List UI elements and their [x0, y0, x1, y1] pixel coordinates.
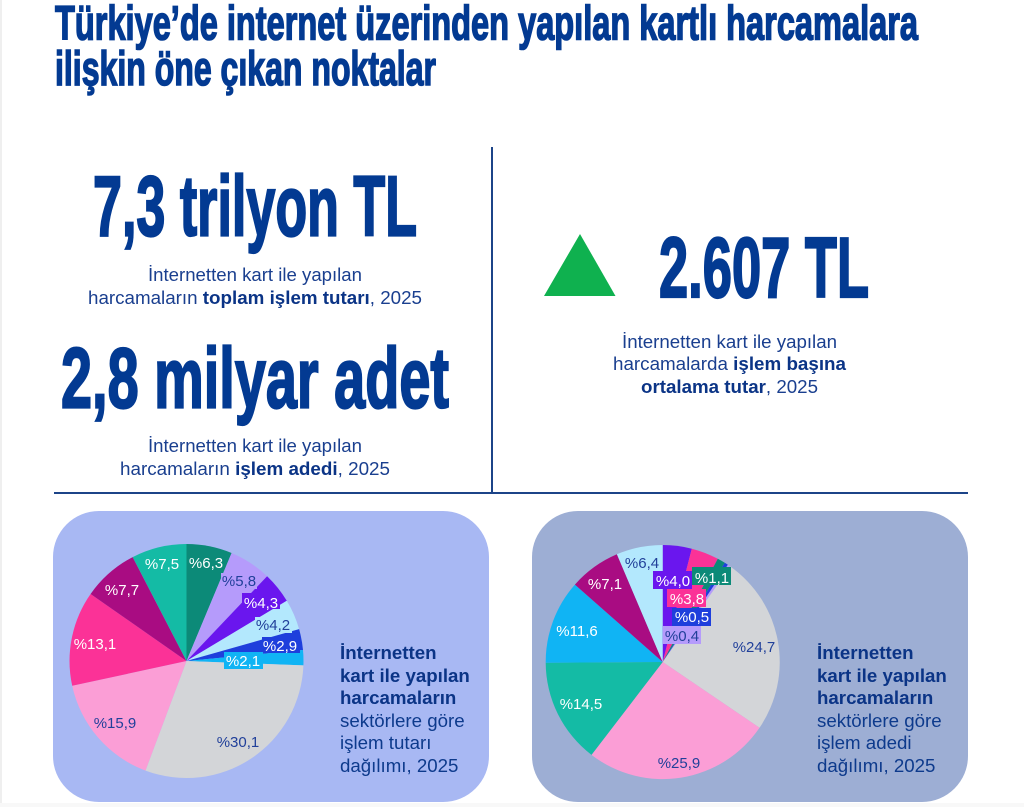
pie chart: amount shares: %4,3 [244, 595, 278, 612]
stat: average per transaction: ortalama tutar, 2025 [641, 376, 818, 397]
pie caption: amount: dağılımı, 2025 [340, 755, 458, 776]
stat: transaction count: İnternetten kart ile yapılan [148, 435, 362, 456]
stat: average per transaction: İnternetten kart ile yapılan [622, 331, 837, 352]
pie chart: count shares: %25,9 [658, 755, 700, 772]
title [55, 0, 918, 96]
pie chart: count shares: %7,1 [588, 576, 622, 593]
pie chart: count shares: %0,4 [665, 628, 699, 645]
pie caption: amount: harcamaların [340, 687, 456, 708]
pie chart: amount shares: %15,9 [94, 715, 136, 732]
icon: green up triangle [544, 234, 616, 296]
stat: total transaction amount: İnternetten kart ile yapılan [148, 264, 362, 285]
pie chart: amount shares: %4,2 [256, 617, 290, 634]
pie chart: count shares: %14,5 [560, 696, 602, 713]
pie chart: amount shares: %13,1 [74, 636, 116, 653]
horizontal divider [54, 492, 968, 494]
pie caption: count: harcamaların [817, 687, 933, 708]
pie chart: count shares: %1,1 [695, 570, 729, 587]
pie chart: count shares: %24,7 [733, 639, 775, 656]
pie chart: count shares: %6,4 [625, 555, 659, 572]
pie caption: amount: işlem tutarı [340, 732, 431, 753]
pie caption: count: İnternetten [817, 642, 914, 663]
title: ilişkin öne çıkan noktalar [55, 43, 436, 96]
pie caption: amount: kart ile yapılan [340, 665, 470, 686]
pie chart: amount shares: %7,7 [105, 582, 139, 599]
pie caption: count: kart ile yapılan [817, 665, 947, 686]
pie chart: count shares: %3,8 [670, 591, 704, 608]
pie caption: count: sektörlere göre [817, 710, 942, 731]
pie chart: amount shares: %7,5 [145, 556, 179, 573]
pie chart: amount shares: %2,1 [226, 653, 260, 670]
pie caption: count: dağılımı, 2025 [817, 755, 935, 776]
stat: transaction count: 2,8 milyar adet [61, 332, 449, 426]
stat: average per transaction: 2.607 TL [659, 221, 869, 316]
pie chart: amount shares: %30,1 [217, 734, 259, 751]
stat: transaction count: harcamaların işlem adedi, 2025 [120, 458, 390, 479]
stat: average per transaction: harcamalarda işlem başına [613, 353, 847, 374]
stat: total transaction amount: 7,3 trilyon TL [93, 160, 417, 254]
pie caption: amount: İnternetten [340, 642, 437, 663]
panel: count by sector [532, 511, 968, 802]
pie chart: amount shares: %5,8 [222, 573, 256, 590]
pie chart: count shares: %11,6 [556, 623, 598, 640]
pie chart: count shares [546, 545, 780, 779]
pie chart: amount shares: %6,3 [189, 555, 223, 572]
stat: total transaction amount [88, 160, 422, 308]
pie chart: count shares: %0,5 [675, 609, 709, 626]
pie chart: amount shares: %2,9 [263, 638, 297, 655]
stat: total transaction amount: harcamaların toplam işlem tutarı, 2025 [88, 287, 422, 308]
pie caption: count: işlem adedi [817, 732, 912, 753]
pie chart: count shares: %4,0 [656, 573, 690, 590]
vertical divider [491, 147, 493, 493]
stat: average per transaction [613, 221, 869, 397]
pie chart: amount shares [70, 544, 303, 778]
pie caption: amount: sektörlere göre [340, 710, 465, 731]
panel: amount by sector [53, 511, 489, 802]
stat: transaction count [61, 332, 449, 479]
